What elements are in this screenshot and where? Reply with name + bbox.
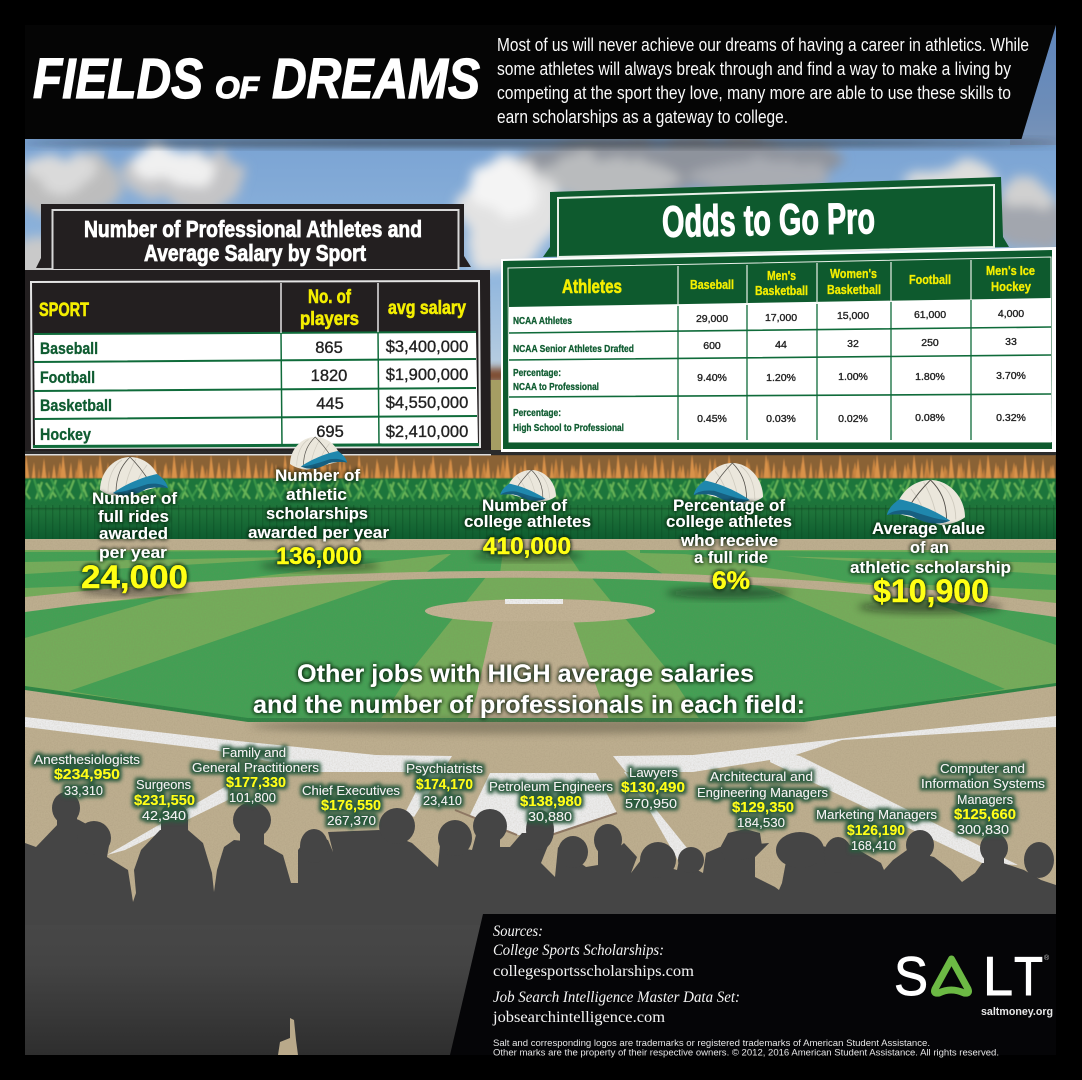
job: architectural managers xyxy=(697,769,828,830)
job: architectural managers: 184,530 xyxy=(737,815,785,830)
job: anesthesiologists xyxy=(34,752,141,798)
sources text: College Sports Scholarships: xyxy=(493,942,664,959)
table: sport salaries: $3,400,000 xyxy=(386,338,468,356)
job: lawyers: Lawyers xyxy=(629,765,678,780)
table: sport salaries: 1820 xyxy=(311,367,347,385)
job: family practitioners: General Practitioners xyxy=(192,760,320,775)
job: computer systems managers: Information Systems xyxy=(921,776,1046,791)
table: odds: Men's Ice xyxy=(986,263,1035,278)
stat: average scholarship value: Average value xyxy=(872,519,985,538)
outfield grass xyxy=(25,550,1056,600)
job: marketing managers: 168,410 xyxy=(851,838,896,853)
table: odds: 3.70% xyxy=(996,370,1026,382)
table: odds: 61,000 xyxy=(914,309,946,321)
logo: SALT: L xyxy=(983,945,1013,1007)
legal text: Salt and corresponding logos are trademarks or registered trademarks of American Student Assistance. xyxy=(493,1038,930,1048)
table: odds: 600 xyxy=(703,340,721,352)
stat: athletic scholarships: athletic xyxy=(286,485,347,504)
job: psychiatrists: $174,170 xyxy=(416,776,473,793)
table: odds: High School to Professional xyxy=(513,422,624,434)
job: architectural managers: Engineering Managers xyxy=(697,785,828,800)
table: odds: 33 xyxy=(1005,336,1017,348)
job: family practitioners: $177,330 xyxy=(226,774,286,791)
intro paragraph xyxy=(497,34,1029,127)
icon: cap 3 xyxy=(500,470,556,502)
stat: percent full ride: a full ride xyxy=(694,548,768,567)
sign heading xyxy=(84,216,422,266)
table: sport salaries: 445 xyxy=(316,395,344,413)
job: surgeons: $231,550 xyxy=(134,792,195,809)
table: odds: 9.40% xyxy=(697,372,727,384)
table: odds: 0.45% xyxy=(697,413,727,425)
table: odds: Baseball xyxy=(690,277,734,292)
stat: average scholarship value: $10,900 xyxy=(873,573,989,609)
job: anesthesiologists: Anesthesiologists xyxy=(34,752,141,767)
table: sport salaries: SPORT xyxy=(39,300,89,321)
stat: average scholarship value: athletic scholarship xyxy=(850,558,1011,577)
stat: percent full ride xyxy=(666,496,792,595)
pitching rubber xyxy=(505,599,563,604)
sign heading: Average Salary by Sport xyxy=(144,240,366,266)
job: chief executives xyxy=(302,783,400,828)
stat: athletic scholarships: awarded per year xyxy=(248,523,389,542)
shadows under stats xyxy=(80,552,1002,613)
table: sport salaries: 865 xyxy=(315,339,343,357)
job: petroleum engineers: 30,880 xyxy=(528,809,572,824)
job: psychiatrists xyxy=(406,761,484,808)
stat: percent full ride: Percentage of xyxy=(673,496,785,515)
job: computer systems managers: Managers xyxy=(957,792,1013,807)
logo: SALT: T xyxy=(1014,945,1043,1007)
table: odds: 0.08% xyxy=(915,412,945,424)
table: sport salaries: Hockey xyxy=(40,426,92,444)
stat: college athletes: college athletes xyxy=(464,512,591,531)
table: odds: Hockey xyxy=(991,279,1032,294)
infield dirt xyxy=(25,685,1056,910)
stat: athletic scholarships: Number of xyxy=(275,466,360,485)
sources text: Job Search Intelligence Master Data Set: xyxy=(493,989,740,1006)
job: architectural managers: Architectural and xyxy=(710,769,813,784)
heading: other jobs: and the number of professionals in each field: xyxy=(253,691,805,719)
job: family practitioners xyxy=(192,745,320,805)
job: psychiatrists: 23,410 xyxy=(423,793,462,808)
stat: athletic scholarships xyxy=(248,466,389,570)
sign heading: Number of Professional Athletes and xyxy=(84,216,422,242)
panel: odds to go pro sign xyxy=(501,177,1056,452)
table: odds: 0.32% xyxy=(996,412,1026,424)
icon: cap 1 xyxy=(100,457,168,497)
icon: cap 4 xyxy=(694,463,763,504)
scene: corn field xyxy=(25,450,1056,541)
table: odds: 32 xyxy=(847,338,859,350)
table: odds: 250 xyxy=(921,337,939,349)
job: marketing managers xyxy=(816,807,938,853)
base path xyxy=(466,621,610,722)
job: chief executives: 267,370 xyxy=(327,813,376,828)
legal text: Other marks are the property of their respective owners. © 2012, 2016 American Student Assistance. All rights reserved. xyxy=(493,1048,999,1058)
sources text xyxy=(492,923,740,1026)
job: anesthesiologists: $234,950 xyxy=(54,766,120,783)
sources text: collegesportsscholarships.com xyxy=(493,963,694,980)
table: odds: 0.03% xyxy=(766,413,796,425)
table: odds: Men's xyxy=(767,268,796,283)
logo: SALT: ® xyxy=(1044,954,1050,962)
table: sport salaries: $2,410,000 xyxy=(386,423,468,441)
table: odds: Percentage: xyxy=(513,407,561,419)
stat: full rides: full rides xyxy=(98,507,169,526)
stat: average scholarship value: of an xyxy=(910,538,949,557)
legal text xyxy=(493,1038,999,1058)
job: lawyers: $130,490 xyxy=(621,779,685,796)
logo: SALT: S xyxy=(894,945,928,1007)
table: sport salaries: No. of xyxy=(308,287,352,308)
job: psychiatrists: Psychiatrists xyxy=(406,761,484,776)
table: sport salaries: Football xyxy=(40,369,95,387)
infield grass xyxy=(25,620,1056,718)
table: sport salaries: 695 xyxy=(316,423,344,441)
table: odds: NCAA Athletes xyxy=(513,315,572,327)
banner: title bar xyxy=(25,25,1056,139)
table: odds: 15,000 xyxy=(837,310,869,322)
table: sport salaries: Basketball xyxy=(40,397,112,415)
table: sport salaries: $4,550,000 xyxy=(386,394,468,412)
sign heading: Odds to Go Pro xyxy=(662,194,875,247)
job: lawyers: 570,950 xyxy=(625,796,677,811)
job: petroleum engineers: Petroleum Engineers xyxy=(489,779,614,794)
stat: full rides: 24,000 xyxy=(81,559,188,595)
panel: sources and logo xyxy=(450,914,1056,1058)
title: DREAMS xyxy=(272,47,480,111)
table: odds: 4,000 xyxy=(998,308,1024,320)
heading: other jobs xyxy=(253,660,805,719)
sources text: jobsearchintelligence.com xyxy=(492,1009,665,1026)
job: petroleum engineers xyxy=(489,779,614,824)
table: sport salaries: Baseball xyxy=(40,340,98,358)
icon: cap 2 xyxy=(290,437,347,470)
job: computer systems managers: 300,830 xyxy=(957,822,1009,837)
table: odds: 1.20% xyxy=(766,372,796,384)
job: surgeons xyxy=(134,777,195,823)
table: odds: 44 xyxy=(775,339,787,351)
pitcher's mound xyxy=(425,599,655,623)
job: computer systems managers xyxy=(921,761,1046,837)
scene: sky and clouds xyxy=(0,25,1072,459)
job: marketing managers: Marketing Managers xyxy=(816,807,938,822)
table: odds: 17,000 xyxy=(765,312,797,324)
logo: SALT: saltmoney.org xyxy=(981,1006,1053,1018)
job: family practitioners: Family and xyxy=(222,745,286,760)
panel: professional athletes sign xyxy=(25,204,491,456)
table: odds: Athletes xyxy=(562,277,622,298)
icon: cap 5 xyxy=(887,480,965,525)
table: odds: NCAA Senior Athletes Drafted xyxy=(513,343,634,355)
logo: SALT xyxy=(894,945,1053,1018)
table: odds: 0.02% xyxy=(838,413,868,425)
stat: college athletes xyxy=(464,496,591,560)
stat: full rides xyxy=(81,489,188,595)
table: odds: NCAA to Professional xyxy=(513,381,599,393)
stat: athletic scholarships: 136,000 xyxy=(276,543,362,570)
table: odds: Basketball xyxy=(827,282,881,297)
stat: full rides: per year xyxy=(99,543,167,562)
job: surgeons: 42,340 xyxy=(142,808,186,823)
job: chief executives: $176,550 xyxy=(321,797,381,814)
title xyxy=(33,47,480,111)
scene: baseball field xyxy=(25,539,1056,910)
table: sport salaries xyxy=(25,270,491,456)
stat: college athletes: Number of xyxy=(482,496,567,515)
job: surgeons: Surgeons xyxy=(136,777,191,792)
stat: full rides: Number of xyxy=(92,489,177,508)
foul lines and batter boxes xyxy=(25,716,1056,865)
job: chief executives: Chief Executives xyxy=(302,783,400,798)
table: odds: 29,000 xyxy=(696,313,728,325)
crowd silhouettes xyxy=(25,792,1056,1055)
stat: full rides: awarded xyxy=(99,524,168,543)
stat: average scholarship value xyxy=(850,519,1011,609)
job: architectural managers: $129,350 xyxy=(732,799,794,816)
table: sport salaries: players xyxy=(300,309,359,330)
job: anesthesiologists: 33,310 xyxy=(64,783,103,798)
dirt arc xyxy=(25,571,1056,617)
table: odds: Basketball xyxy=(755,283,808,298)
title: FIELDS xyxy=(33,47,203,111)
table: odds: Percentage: xyxy=(513,367,561,379)
job: family practitioners: 101,800 xyxy=(229,790,276,805)
job: computer systems managers: Computer and xyxy=(940,761,1025,776)
table: odds: Football xyxy=(909,272,951,287)
table: odds xyxy=(501,247,1056,452)
stat: percent full ride: college athletes xyxy=(666,512,792,531)
intro paragraph: earn scholarships as a gateway to college. xyxy=(497,106,788,127)
stat: percent full ride: who receive xyxy=(680,531,778,550)
table: odds: Women's xyxy=(830,266,877,281)
table: sport salaries: avg salary xyxy=(388,298,466,319)
heading: other jobs: Other jobs with HIGH average salaries xyxy=(297,660,754,688)
job: computer systems managers: $125,660 xyxy=(954,806,1016,823)
table: sport salaries: $1,900,000 xyxy=(386,366,468,384)
table: odds: 1.00% xyxy=(838,371,868,383)
job: petroleum engineers: $138,980 xyxy=(520,793,582,810)
stat: percent full ride: 6% xyxy=(712,567,750,595)
table: odds: 1.80% xyxy=(915,371,945,383)
job: marketing managers: $126,190 xyxy=(847,822,905,839)
sources text: Sources: xyxy=(493,923,543,940)
job: lawyers xyxy=(621,765,685,811)
stat: college athletes: 410,000 xyxy=(483,533,571,560)
title: OF xyxy=(215,70,260,105)
stat: athletic scholarships: scholarships xyxy=(266,504,368,523)
